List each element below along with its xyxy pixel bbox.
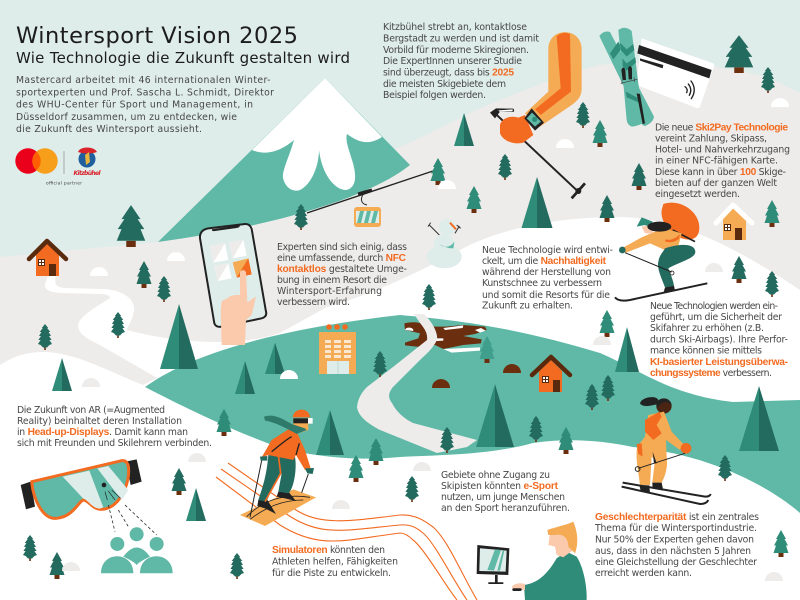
text: Nachhaltigkeit: Kunstschnee zu verbessern bbox=[482, 278, 602, 289]
skier on simulator bbox=[240, 410, 316, 526]
text: AR: in Head-up-Displays. Damit kann man bbox=[17, 427, 188, 438]
text: AR: sich mit Freunden und Skilehrern verbinden. bbox=[17, 438, 212, 449]
intro text: des WHU-Center für Sport und Management, in bbox=[16, 100, 253, 111]
text: e-Sport: Skipisten könnten e-Sport bbox=[441, 481, 559, 492]
text: Simulatoren bbox=[272, 545, 398, 579]
intro text: sportexperten und Prof. Sascha L. Schmidt, Direktor bbox=[16, 88, 274, 98]
brown rock cliff bbox=[404, 322, 487, 353]
text: Kitzbühel contactless: die meisten Skigebiete dem bbox=[383, 79, 506, 90]
text: Kitzbühel contactless: sind überzeugt, dass bis 2025 bbox=[383, 68, 514, 78]
text: Sicherheit: geführt, um die Sicherheit der bbox=[650, 312, 782, 323]
text: Ski2Pay bbox=[655, 122, 790, 200]
text: Simulatoren: Athleten helfen, Fähigkeiten bbox=[272, 556, 398, 568]
text: Ski2Pay: Diese kann in über 100 Skige- bbox=[655, 167, 786, 178]
intro text: die Zukunft des Wintersport aussieht. bbox=[16, 124, 202, 135]
text: Sicherheit: chungssysteme verbessern. bbox=[650, 368, 772, 379]
icon: gondola bbox=[354, 207, 381, 227]
text: Kitzbühel contactless bbox=[383, 22, 539, 101]
subtitle: Wie Technologie die Zukunft gestalten wird bbox=[16, 49, 350, 67]
intro text: Düsseldorf zusammen, um zu entdecken, wie bbox=[16, 112, 237, 123]
icon: NFC waves bbox=[685, 81, 694, 99]
text: Simulatoren: Simulatoren könnten den bbox=[272, 545, 385, 556]
text: Nachhaltigkeit: und somit die Resorts für die bbox=[482, 290, 610, 301]
text: Ski2Pay: bieten auf der ganzen Welt bbox=[655, 178, 777, 189]
logo: Kitzbühel: Kitzbühel bbox=[74, 170, 101, 177]
text: Kitzbühel contactless: Bergstadt zu werden und ist damit bbox=[383, 34, 539, 44]
ropeway cable bbox=[307, 171, 433, 227]
green valley bbox=[145, 315, 800, 513]
raised arm with smartwatch and ski pole bbox=[490, 32, 585, 198]
text: NFC kontaktlos: eine umfassende, durch NFC bbox=[277, 253, 407, 264]
text: AR bbox=[17, 405, 212, 449]
ski tracks bbox=[216, 463, 477, 600]
intro text: Mastercard arbeitet mit 46 internationalen Winter- bbox=[16, 75, 270, 86]
goggles with head-up display bbox=[21, 459, 173, 573]
ski right bbox=[618, 28, 645, 127]
logos bbox=[15, 148, 101, 186]
text: Nachhaltigkeit bbox=[482, 245, 613, 312]
hotel stars bbox=[326, 324, 348, 330]
hotel bbox=[319, 324, 356, 374]
text: Geschlechterparität: Nur 50% der Experten gehen davon bbox=[595, 535, 754, 546]
payment card bbox=[637, 38, 714, 108]
text: Ski2Pay: in einer NFC-fähigen Karte. bbox=[655, 156, 778, 167]
text: Kitzbühel contactless: Die ExpertInnen unserer Studie bbox=[383, 56, 522, 67]
dark tiered trees bbox=[50, 35, 753, 579]
text: Simulatoren: für die Piste zu entwickeln. bbox=[272, 568, 391, 579]
text: Kitzbühel contactless: Kitzbühel strebt an, kontaktlose bbox=[383, 22, 527, 33]
signal lines bbox=[108, 505, 157, 535]
title: Wintersport Vision 2025 bbox=[16, 23, 298, 49]
valley road bbox=[357, 314, 477, 453]
logo: Mastercard bbox=[15, 148, 58, 174]
text: AR: Reality) beinhaltet deren Installation bbox=[17, 416, 182, 427]
intro text bbox=[16, 75, 274, 135]
text: e-Sport: an den Sport heranzuführen. bbox=[441, 503, 570, 514]
text: e-Sport: nutzen, um junge Menschen bbox=[441, 492, 565, 503]
mountain snow cap bbox=[252, 78, 382, 191]
text: Geschlechterparität: Geschlechterparität ist ein zentrales bbox=[595, 512, 759, 523]
text: Sicherheit: Neue Technologien werden ein- bbox=[650, 301, 778, 312]
text: Geschlechterparität: Thema für die Wintersportindustrie. bbox=[594, 523, 757, 534]
text: Sicherheit bbox=[650, 301, 788, 379]
medium tiered trees bbox=[216, 120, 788, 557]
house: left bbox=[29, 241, 66, 276]
text: Kitzbühel contactless: Vorbild für moderne Skiregionen. bbox=[383, 45, 529, 56]
text: e-Sport bbox=[441, 470, 570, 514]
text: Nachhaltigkeit: Neue Technologie wird entwi- bbox=[482, 245, 613, 256]
text: Nachhaltigkeit: ckelt, um die Nachhaltigkeit bbox=[482, 256, 607, 267]
mountain bbox=[158, 78, 410, 242]
phone with hand bbox=[200, 224, 266, 345]
icon: hand bbox=[221, 270, 256, 345]
text: Geschlechterparität: eine Gleichstellung der Geschlechter bbox=[595, 557, 757, 568]
text: Ski2Pay: Hotel- und Nahverkehrzugang bbox=[655, 144, 790, 156]
icon: group of people bbox=[101, 527, 173, 573]
text: Geschlechterparität: aus, dass in den nächsten 5 Jahren bbox=[595, 546, 751, 557]
skier with backpack bbox=[615, 203, 707, 301]
text: Sicherheit: mance können sie mittels bbox=[650, 346, 762, 356]
text: Sicherheit: KI-basierter Leistungsüberwa- bbox=[650, 357, 788, 368]
ski binding bbox=[621, 66, 632, 80]
skier woman bbox=[622, 397, 711, 504]
ski left bbox=[599, 31, 654, 126]
house: upper right bbox=[716, 205, 752, 240]
NFC tile bbox=[233, 258, 252, 278]
text: NFC kontaktlos: Wintersport-Erfahrung bbox=[277, 286, 382, 297]
snowman bbox=[427, 219, 462, 268]
snow mounds bbox=[62, 98, 789, 581]
text: NFC kontaktlos: bung in einem Resort die bbox=[277, 275, 387, 286]
cone trees bbox=[52, 113, 779, 521]
text: Ski2Pay: vereint Zahlung, Skipass, bbox=[655, 134, 767, 144]
text: Kitzbühel contactless: Beispiel folgen werden. bbox=[383, 90, 486, 101]
grey snow hill bbox=[0, 62, 800, 400]
text: Ski2Pay: eingesetzt werden. bbox=[655, 189, 740, 200]
text: e-Sport: Gebiete ohne Zugang zu bbox=[441, 470, 550, 481]
text: AR: Die Zukunft von AR (=Augmented bbox=[17, 405, 165, 416]
text: NFC kontaktlos: verbessern wird. bbox=[277, 297, 350, 308]
text: Sicherheit: Skifahrer zu erhöhen (z.B. bbox=[650, 323, 764, 334]
text: Nachhaltigkeit: Zukunft zu erhalten. bbox=[482, 300, 573, 312]
text: Geschlechterparität bbox=[594, 512, 759, 579]
text: Geschlechterparität: erreicht werden kann. bbox=[595, 568, 692, 579]
text: NFC kontaktlos: Experten sind sich einig, dass bbox=[277, 242, 407, 253]
text: NFC kontaktlos: kontaktlos gestaltete Umge- bbox=[277, 264, 407, 275]
skis bbox=[599, 28, 654, 127]
text: Nachhaltigkeit: während der Herstellung von bbox=[482, 267, 611, 278]
text: Sicherheit: durch Ski-Airbags). Ihre Perfor- bbox=[650, 334, 788, 346]
white snow field and path bbox=[0, 217, 800, 600]
person at computer bbox=[477, 522, 587, 600]
text: NFC kontaktlos bbox=[277, 242, 407, 308]
logos: official partner bbox=[46, 180, 82, 186]
house: valley bbox=[532, 357, 570, 392]
text: Ski2Pay: Die neue Ski2Pay Technologie bbox=[655, 122, 788, 134]
